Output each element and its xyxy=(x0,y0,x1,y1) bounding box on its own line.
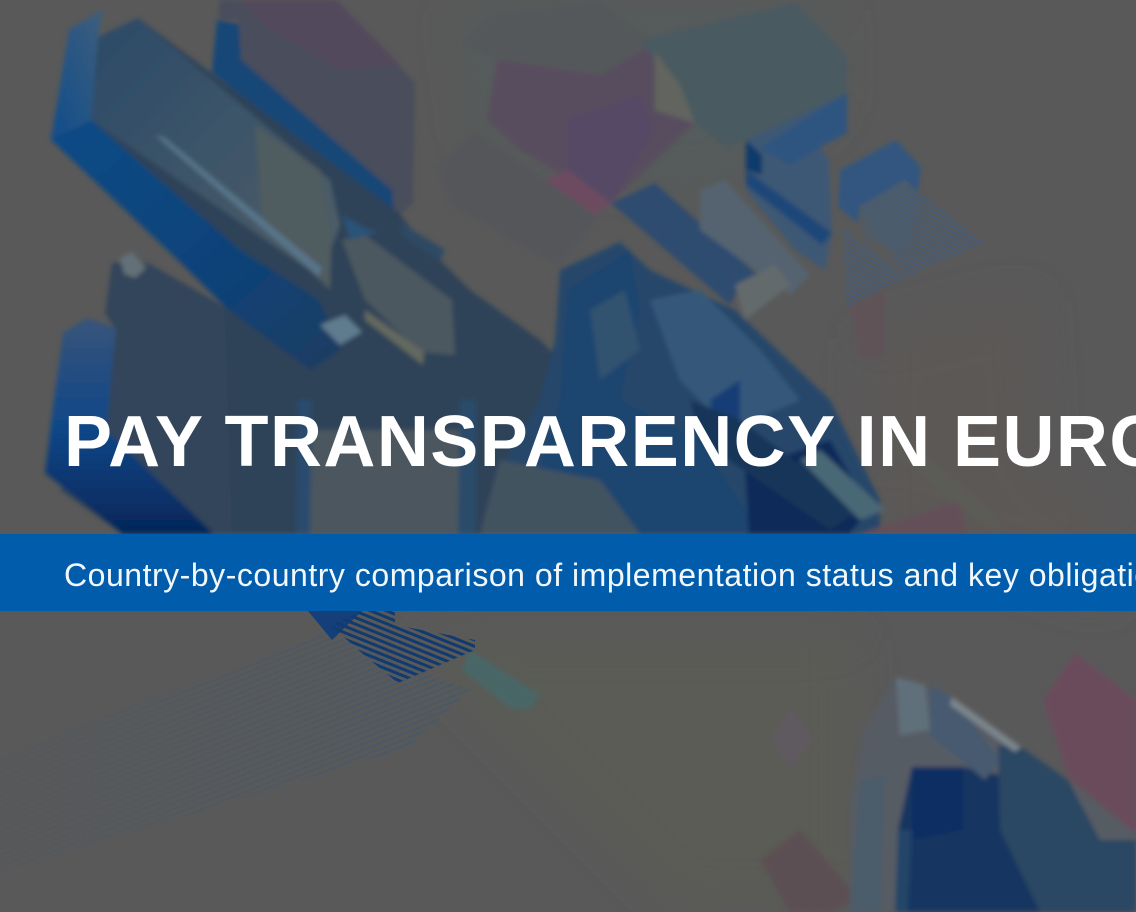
block: bottom right cluster xyxy=(850,677,1136,912)
highlight: diagonal bar xyxy=(155,135,322,277)
block: dark blue block xyxy=(746,93,847,270)
block: green slate xyxy=(640,3,847,147)
block: small blue box xyxy=(838,140,921,223)
block: long panel xyxy=(91,18,340,277)
block: dark diagonal strips xyxy=(611,183,760,305)
soft tint wash xyxy=(420,10,1110,900)
subtitle band xyxy=(0,534,1136,611)
stripes: lower left faint lines xyxy=(152,634,470,822)
block: mid lighter tiles xyxy=(342,235,455,355)
block: blue cluster right centre xyxy=(490,242,880,534)
block: lower left column xyxy=(60,263,232,534)
block: purple upper xyxy=(219,0,415,220)
block: right upper beige tile xyxy=(437,130,600,268)
block: lower central xyxy=(310,430,460,534)
block: central slate xyxy=(90,18,600,534)
stripes: right hatching xyxy=(842,180,985,307)
block: faint lower tiles xyxy=(770,706,815,770)
block: bottom right pink xyxy=(1043,653,1136,833)
block: teal strip xyxy=(462,650,540,710)
block: second blue strip xyxy=(212,20,395,222)
block: left frame xyxy=(51,9,103,140)
block: long dark strip xyxy=(51,120,341,370)
block: dark blue stripes under band xyxy=(308,611,475,683)
